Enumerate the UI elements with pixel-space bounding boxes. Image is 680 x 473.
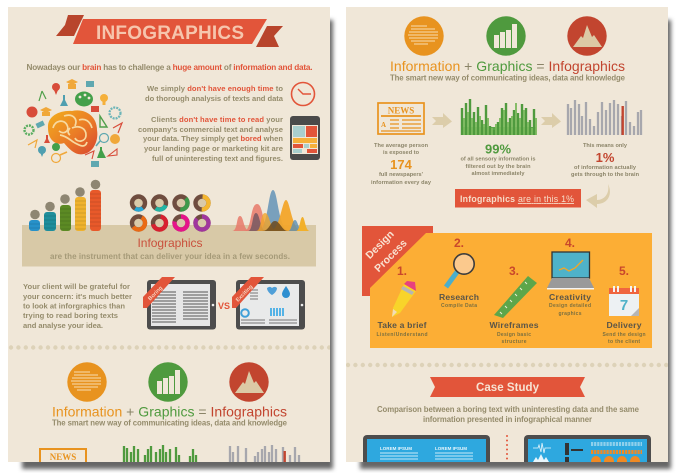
mountain chart xyxy=(232,190,310,231)
icon: clock xyxy=(292,82,314,106)
step 4 xyxy=(547,236,594,317)
callout: in this 1% xyxy=(455,189,581,208)
brain xyxy=(48,110,97,154)
text: no time: We simply don't have enough time to xyxy=(147,84,283,93)
brain illustration with icons xyxy=(24,79,122,167)
text: newspapers stat xyxy=(371,143,432,186)
equation subheading: The smart new way of communicating ideas, data and knowledge xyxy=(52,418,288,428)
dotted divider xyxy=(11,345,330,350)
equation circles xyxy=(67,362,269,402)
step 4: graphics xyxy=(558,311,582,317)
arrow: to grey chart xyxy=(541,113,561,128)
step 3 xyxy=(490,264,539,345)
news icon cropped: NEWS xyxy=(50,452,76,462)
panel: left page xyxy=(8,7,330,473)
stacked coin bars xyxy=(29,180,101,231)
tablet: boring: Boring xyxy=(147,285,164,302)
step 2: Research xyxy=(439,292,479,302)
step 2: 2. xyxy=(454,236,464,250)
donut charts xyxy=(129,194,211,232)
small icons xyxy=(24,79,122,167)
text: clients xyxy=(138,115,283,163)
comparison text xyxy=(377,405,640,424)
callout: in this 1%: Infographics are in this 1% xyxy=(460,194,574,204)
band subheading: are the instrument that can deliver your idea in a few seconds. xyxy=(50,252,290,261)
step 2: Compile Data xyxy=(441,303,477,309)
grey bars cropped xyxy=(230,445,299,462)
news icon cropped xyxy=(39,448,87,462)
arrow: curved back xyxy=(586,184,610,208)
text: 1 percent stat: 1% xyxy=(596,150,615,165)
equation circles xyxy=(404,16,607,56)
text: newspapers stat: full newspapers' xyxy=(379,172,424,178)
comparison text: information presented in infographical manner xyxy=(423,415,592,424)
step 3: Design basic xyxy=(497,332,531,338)
tablet: exciting xyxy=(232,277,305,330)
tablet: boring text xyxy=(363,435,490,470)
step 1 xyxy=(376,264,428,338)
step 3: 3. xyxy=(509,264,519,278)
design process corner: Process xyxy=(372,237,410,275)
vs label: VS xyxy=(218,301,230,311)
circle: information xyxy=(67,362,107,402)
bar chart: 99 percent xyxy=(461,99,536,135)
equation heading: Information + Graphics = Infographics xyxy=(52,404,287,420)
text: 99 percent stat: filtered out by the brain xyxy=(466,164,531,170)
step 4: Design detailed xyxy=(549,303,591,309)
red bar cropped xyxy=(284,451,286,462)
text: grateful client: and analyse your idea. xyxy=(23,321,103,330)
circle: infographics xyxy=(229,362,269,402)
icon: newspaper: A xyxy=(381,121,386,129)
step 5: 5. xyxy=(619,264,629,278)
step 5: Send the design xyxy=(602,332,646,338)
step 5: 7 xyxy=(620,297,628,314)
icon: newspaper: NEWS xyxy=(388,106,414,116)
title ribbon: INFOGRAPHICS xyxy=(96,23,244,44)
icon: phone xyxy=(290,116,320,160)
tablet: boring xyxy=(143,277,216,330)
text: newspapers stat: information every day xyxy=(371,180,432,186)
text: grateful client: your concern: it's much better xyxy=(23,292,132,301)
design process corner: Design xyxy=(363,228,397,262)
tablet: boring text: LOREM IPSUM xyxy=(435,446,467,451)
text: 1 percent stat: of information actually xyxy=(574,165,637,171)
text: clients: company's commercial text and analyse xyxy=(138,125,283,134)
tablet: boring text: LOREM IPSUM xyxy=(380,446,412,451)
text: grateful client: to look at inforgraphics than xyxy=(23,302,125,310)
step 5: to the client xyxy=(608,339,640,345)
circle: graphics xyxy=(148,362,188,402)
step 3: structure xyxy=(502,339,527,345)
case study ribbon xyxy=(430,377,585,397)
text: newspapers stat: 174 xyxy=(390,157,413,172)
text: 99 percent stat: almost immediately xyxy=(472,171,525,177)
text: clients: your landing page or marketing kit are xyxy=(144,144,283,153)
text: clients: full of uninteresting text and figures. xyxy=(152,154,283,163)
text: 1 percent stat xyxy=(571,143,640,178)
design process corner xyxy=(362,226,433,296)
text: 1 percent stat: gets through to the brain xyxy=(571,172,640,178)
step 5: Delivery xyxy=(606,320,642,330)
step 1: 1. xyxy=(397,264,407,278)
step 2 xyxy=(439,236,479,309)
text: 1 percent stat: This means only xyxy=(583,143,628,149)
text: clients: Clients don't have time to read your xyxy=(151,115,283,124)
step 4: Creativity xyxy=(549,292,591,302)
circle: graphics xyxy=(486,16,526,56)
tan band xyxy=(22,225,316,266)
panel: design process xyxy=(362,226,652,348)
vertical dotted divider xyxy=(506,436,508,462)
equation subheading: The smart new way of communicating ideas, data and knowledge xyxy=(390,74,626,82)
tablet: infographic xyxy=(524,435,651,470)
title ribbon xyxy=(56,15,283,47)
equation heading: Information + Graphics = Infographics xyxy=(390,58,625,74)
step 4: 4. xyxy=(565,236,575,250)
bar chart: 1 percent xyxy=(568,100,641,135)
text: newspapers stat: The average person xyxy=(374,143,429,149)
tablet: exciting: Exciting xyxy=(235,284,254,303)
text: newspapers stat: is exposed to xyxy=(383,150,420,156)
step 1: Take a brief xyxy=(378,320,427,330)
step 1: Listen/Understand xyxy=(376,332,428,338)
text: clients: your data. They simply get bored when xyxy=(143,134,283,143)
text: 99 percent stat xyxy=(460,142,536,177)
case study ribbon: Case Study xyxy=(476,382,540,394)
text: 99 percent stat: of all sensory information is xyxy=(460,156,536,162)
circle: infographics xyxy=(567,16,607,56)
comparison text: Comparison between a boring text with uninteresting data and the same xyxy=(377,405,640,414)
dotted divider xyxy=(348,363,668,367)
band heading: Infographics xyxy=(138,236,202,250)
step 3: Wireframes xyxy=(490,320,539,330)
text: 99 percent stat: 99% xyxy=(485,142,511,156)
icon: newspaper xyxy=(378,103,424,134)
text: grateful client: trying to read boring texts xyxy=(23,311,118,320)
intro sentence: Nowadays our brain has to challenge a huge amount of information and data. xyxy=(26,63,312,72)
text: grateful client: Your client will be grateful for xyxy=(23,282,130,291)
text: no time line 2: do thorough analysis of texts and data xyxy=(145,94,284,103)
panel: right page xyxy=(346,7,668,470)
green bars cropped xyxy=(124,445,196,462)
circle: information xyxy=(404,16,444,56)
arrow: to green chart xyxy=(432,113,452,128)
step 5 xyxy=(602,264,646,345)
text: grateful client xyxy=(23,282,132,330)
